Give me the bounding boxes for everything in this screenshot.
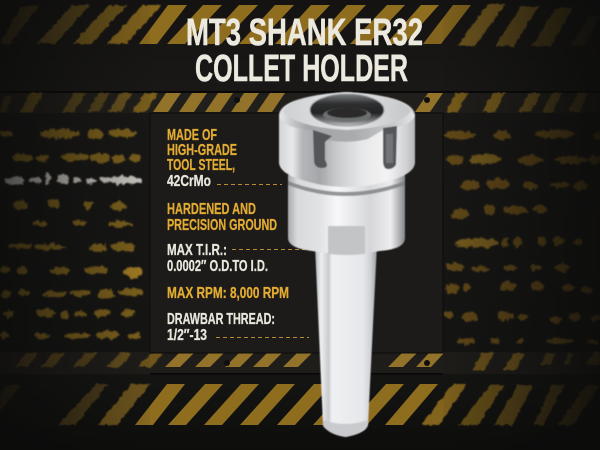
spec: drawbar thread (167, 311, 275, 344)
spec: material: TOOL STEEL, (167, 157, 235, 174)
central dark panel (150, 113, 443, 353)
spec: drawbar thread: DRAWBAR THREAD: (167, 311, 275, 328)
wrench flat (328, 226, 365, 255)
retaining groove (288, 181, 405, 196)
tapered shank (315, 245, 377, 437)
title (186, 12, 423, 90)
nut bore (310, 94, 384, 126)
spec: hardening: HARDENED AND (167, 201, 256, 218)
spec: runout: 0.0002″ O.D.TO I.D. (167, 258, 268, 275)
spec: material: MADE OF (167, 127, 217, 144)
left edge fade (0, 0, 150, 450)
left distressed stripe panel (0, 129, 143, 339)
leader line: material (217, 184, 282, 186)
specification text (167, 127, 309, 344)
spec: max rpm: MAX RPM: 8,000 RPM (167, 285, 289, 302)
leader line: runout (232, 248, 305, 250)
left slot (313, 130, 332, 168)
spec: material: HIGH-GRADE (167, 142, 237, 159)
leader line: thread (216, 336, 309, 338)
spec: runout: MAX T.I.R.: (167, 242, 227, 259)
spec: drawbar thread: 1/2″-13 (167, 327, 207, 344)
title: COLLET HOLDER (195, 48, 408, 90)
right slot (383, 126, 397, 169)
spec: hardening (167, 201, 277, 234)
right distressed stripe panel (443, 130, 600, 344)
spec: material: 42CrMo (167, 173, 211, 190)
collet nut (279, 92, 415, 187)
bottom large hazard stripes (0, 384, 600, 425)
top large hazard stripes (0, 4, 600, 46)
spec: runout (167, 242, 268, 275)
right slot highlight (386, 134, 393, 163)
collet holder tool (279, 92, 415, 437)
bottom narrow hazard band (0, 352, 600, 374)
spec: hardening: PRECISION GROUND (167, 217, 277, 234)
spec: material (167, 127, 237, 190)
title: MT3 SHANK ER32 (186, 12, 423, 54)
right edge fade (443, 0, 600, 450)
holder body (288, 175, 405, 254)
top narrow hazard band (0, 91, 600, 113)
